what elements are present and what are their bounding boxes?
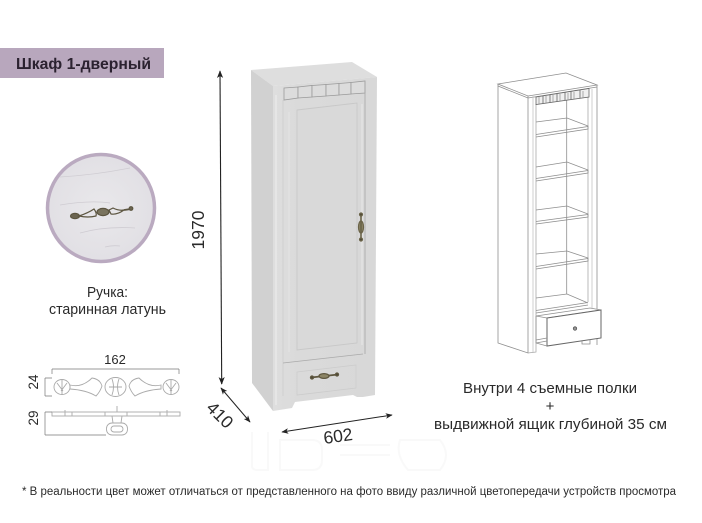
title: Шкаф 1-дверный: [16, 56, 151, 73]
interior description: [434, 380, 667, 433]
height label 24: [26, 374, 52, 396]
cornice grid: [284, 81, 365, 100]
handle side view: [52, 406, 180, 435]
depth arrow: [221, 388, 250, 422]
shelf 4: [536, 251, 588, 269]
icon: door handle: [358, 213, 364, 241]
width label: 602: [322, 424, 354, 448]
interior description: выдвижной ящик глубиной 35 см: [434, 416, 667, 433]
drawer: [536, 308, 601, 346]
icon: brass handle: [70, 207, 133, 219]
handle front view: [54, 378, 179, 396]
interior description: +: [546, 398, 555, 415]
depth label: 410: [203, 398, 238, 433]
footnote: * В реальности цвет может отличаться от представленного на фото ввиду различной цветопередачи устройств просмотра: [22, 486, 677, 498]
handle caption: [49, 285, 166, 318]
title banner: [0, 48, 164, 78]
interior description: Внутри 4 съемные полки: [463, 380, 637, 397]
wardrobe front: [273, 77, 377, 411]
handle caption: Ручка:: [87, 285, 128, 301]
height label: 1970: [188, 210, 208, 249]
handle caption: старинная латунь: [49, 302, 166, 318]
cornice grid: [536, 88, 589, 104]
depth label 29: [26, 410, 106, 435]
height label 24: 24: [26, 374, 41, 390]
door edge: [364, 81, 366, 354]
handle dimensions drawing: [26, 352, 180, 435]
handle close-up circle: [48, 154, 154, 262]
drawer panel: [297, 365, 356, 395]
width arrow: [282, 415, 392, 432]
icon: drawer handle: [310, 373, 338, 379]
shelf 2: [536, 162, 588, 181]
height arrow: [220, 71, 222, 384]
wardrobe side: [251, 70, 273, 411]
wardrobe: [251, 62, 377, 411]
drawer knob: [573, 327, 577, 330]
cabinet outline: [498, 73, 597, 353]
cabinet floor: [536, 294, 588, 313]
width dimension: 162: [104, 352, 126, 367]
drawer line: [283, 354, 363, 363]
shelf 3: [536, 206, 588, 224]
door panel: [297, 103, 357, 350]
interior line drawing: [498, 73, 601, 353]
wardrobe top: [251, 62, 377, 86]
shelf 1: [536, 118, 588, 137]
depth label 29: 29: [26, 410, 41, 426]
width dimension: [52, 352, 179, 374]
watermark: [252, 432, 446, 470]
